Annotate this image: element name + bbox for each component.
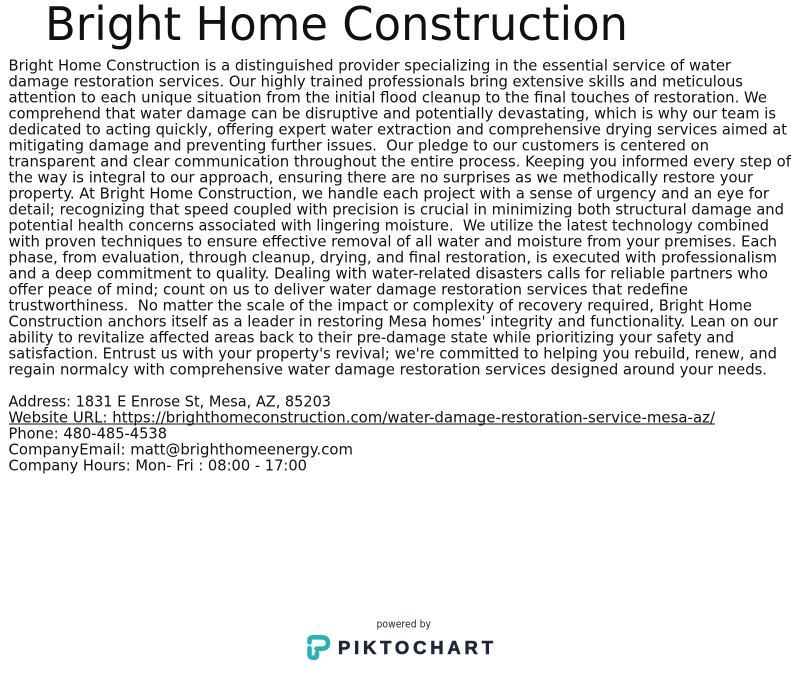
icon: piktochart logo xyxy=(310,637,328,658)
text block: company description: detail; recognizing that speed coupled with precision is crucial in minimizing both structural damage and xyxy=(8,200,784,218)
text block: company description: damage restoration services. Our highly trained professionals bring extensive skills and meticulous xyxy=(8,72,743,90)
text block: company description: the way is integral to our approach, ensuring there are no surprises as we methodically restore your xyxy=(8,168,754,186)
text block: company description: and a deep commitment to quality. Dealing with water-related disasters calls for reliable partners who xyxy=(8,264,768,282)
powered by label: powered by xyxy=(376,618,431,630)
text block: company description: property. At Bright Home Construction, we handle each project with a sense of urgency and an eye for xyxy=(8,184,770,202)
text block: company description: comprehend that water damage can be disruptive and potentially devastating, which is why our team is xyxy=(8,104,776,122)
logo wordmark: PIKTOCHART xyxy=(338,637,494,658)
text block: company description: phase, from evaluation, through cleanup, drying, and final restoration, is executed with professionalism xyxy=(8,248,777,266)
text block: contact details: Company Hours: Mon- Fri : 08:00 - 17:00 xyxy=(8,456,307,474)
text block: company description: trustworthiness. No matter the scale of the impact or complexity of recovery required, Bright Home xyxy=(8,296,752,314)
piktochart branding xyxy=(310,618,494,658)
text block: company description: attention to each unique situation from the initial flood cleanup to the final touches of restoration. We xyxy=(8,88,767,106)
text block: contact details: Address: 1831 E Enrose St, Mesa, AZ, 85203 xyxy=(8,392,331,410)
text block: company description: with proven techniques to ensure effective removal of all water and moisture from your premises. Each xyxy=(8,232,777,250)
text block: company description: offer peace of mind; count on us to deliver water damage restoration services that redefine xyxy=(8,280,688,298)
text block: contact details: Phone: 480-485-4538 xyxy=(8,424,167,442)
text block: contact details xyxy=(8,392,716,474)
text block: contact details: Website URL: https://brighthomeconstruction.com/water-damage-restoration-service-mesa-az/ xyxy=(8,408,716,426)
text block: company description: Construction anchors itself as a leader in restoring Mesa homes' integrity and functionality. Lean on our xyxy=(8,312,779,330)
text block: company description: mitigating damage and preventing further issues. Our pledge to our customers is centered on xyxy=(8,136,709,154)
text block: company description: potential health concerns associated with lingering moisture. We utilize the latest technology combined xyxy=(8,216,769,234)
text block: company description xyxy=(8,56,792,378)
text block: company description: regain normalcy with comprehensive water damage restoration services designed around your needs. xyxy=(8,360,767,378)
text block: contact details: CompanyEmail: matt@brighthomeenergy.com xyxy=(8,440,353,458)
text block: company description: ability to revitalize affected areas back to their pre-damage state while prioritizing your safety and xyxy=(8,328,734,346)
text block: company description: satisfaction. Entrust us with your property's revival; we're committed to helping you rebuild, renew, and xyxy=(8,344,777,362)
text block: company description: Bright Home Construction is a distinguished provider specializing in the essential service of water xyxy=(8,56,732,74)
